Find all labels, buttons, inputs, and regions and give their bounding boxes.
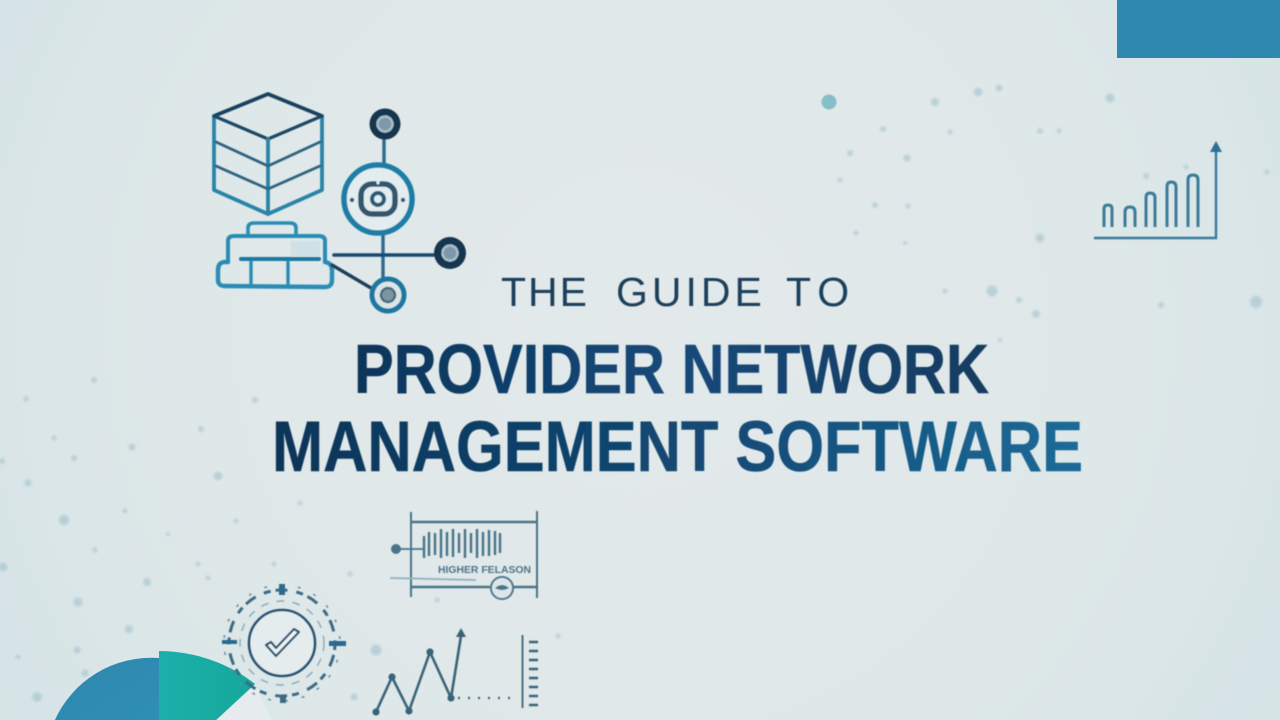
arrowhead [1210,141,1222,152]
line chart icon [372,628,538,716]
teal dot [822,94,836,110]
icon: central gear node [344,165,412,233]
top-right corner block [1117,0,1280,58]
pie chart [54,651,272,720]
title line 2: MANAGEMENT SOFTWARE [272,408,1083,487]
heading: the guide to: TO [786,269,856,315]
heading: the guide to: GUIDE [616,269,766,315]
title line 1: PROVIDER NETWORK [354,330,989,408]
icon: server base [218,223,332,287]
heading: the guide to: THE [501,269,589,315]
waveform panel icon [390,511,537,599]
check mark [266,629,299,656]
pie: light segment [214,685,272,720]
connector lines [332,138,436,288]
shield check badge [222,584,346,703]
icon: network diagram with cube and server [214,94,466,311]
icon: right node [434,237,466,269]
icon: bottom node [372,279,404,311]
pie: teal segment [159,651,255,720]
icon: layered cube [214,94,322,214]
bar chart icon [1094,141,1222,238]
icon: top node [370,108,400,140]
waveform caption: HIGHER FELASON [438,565,531,576]
pie: blue segment [54,658,159,720]
